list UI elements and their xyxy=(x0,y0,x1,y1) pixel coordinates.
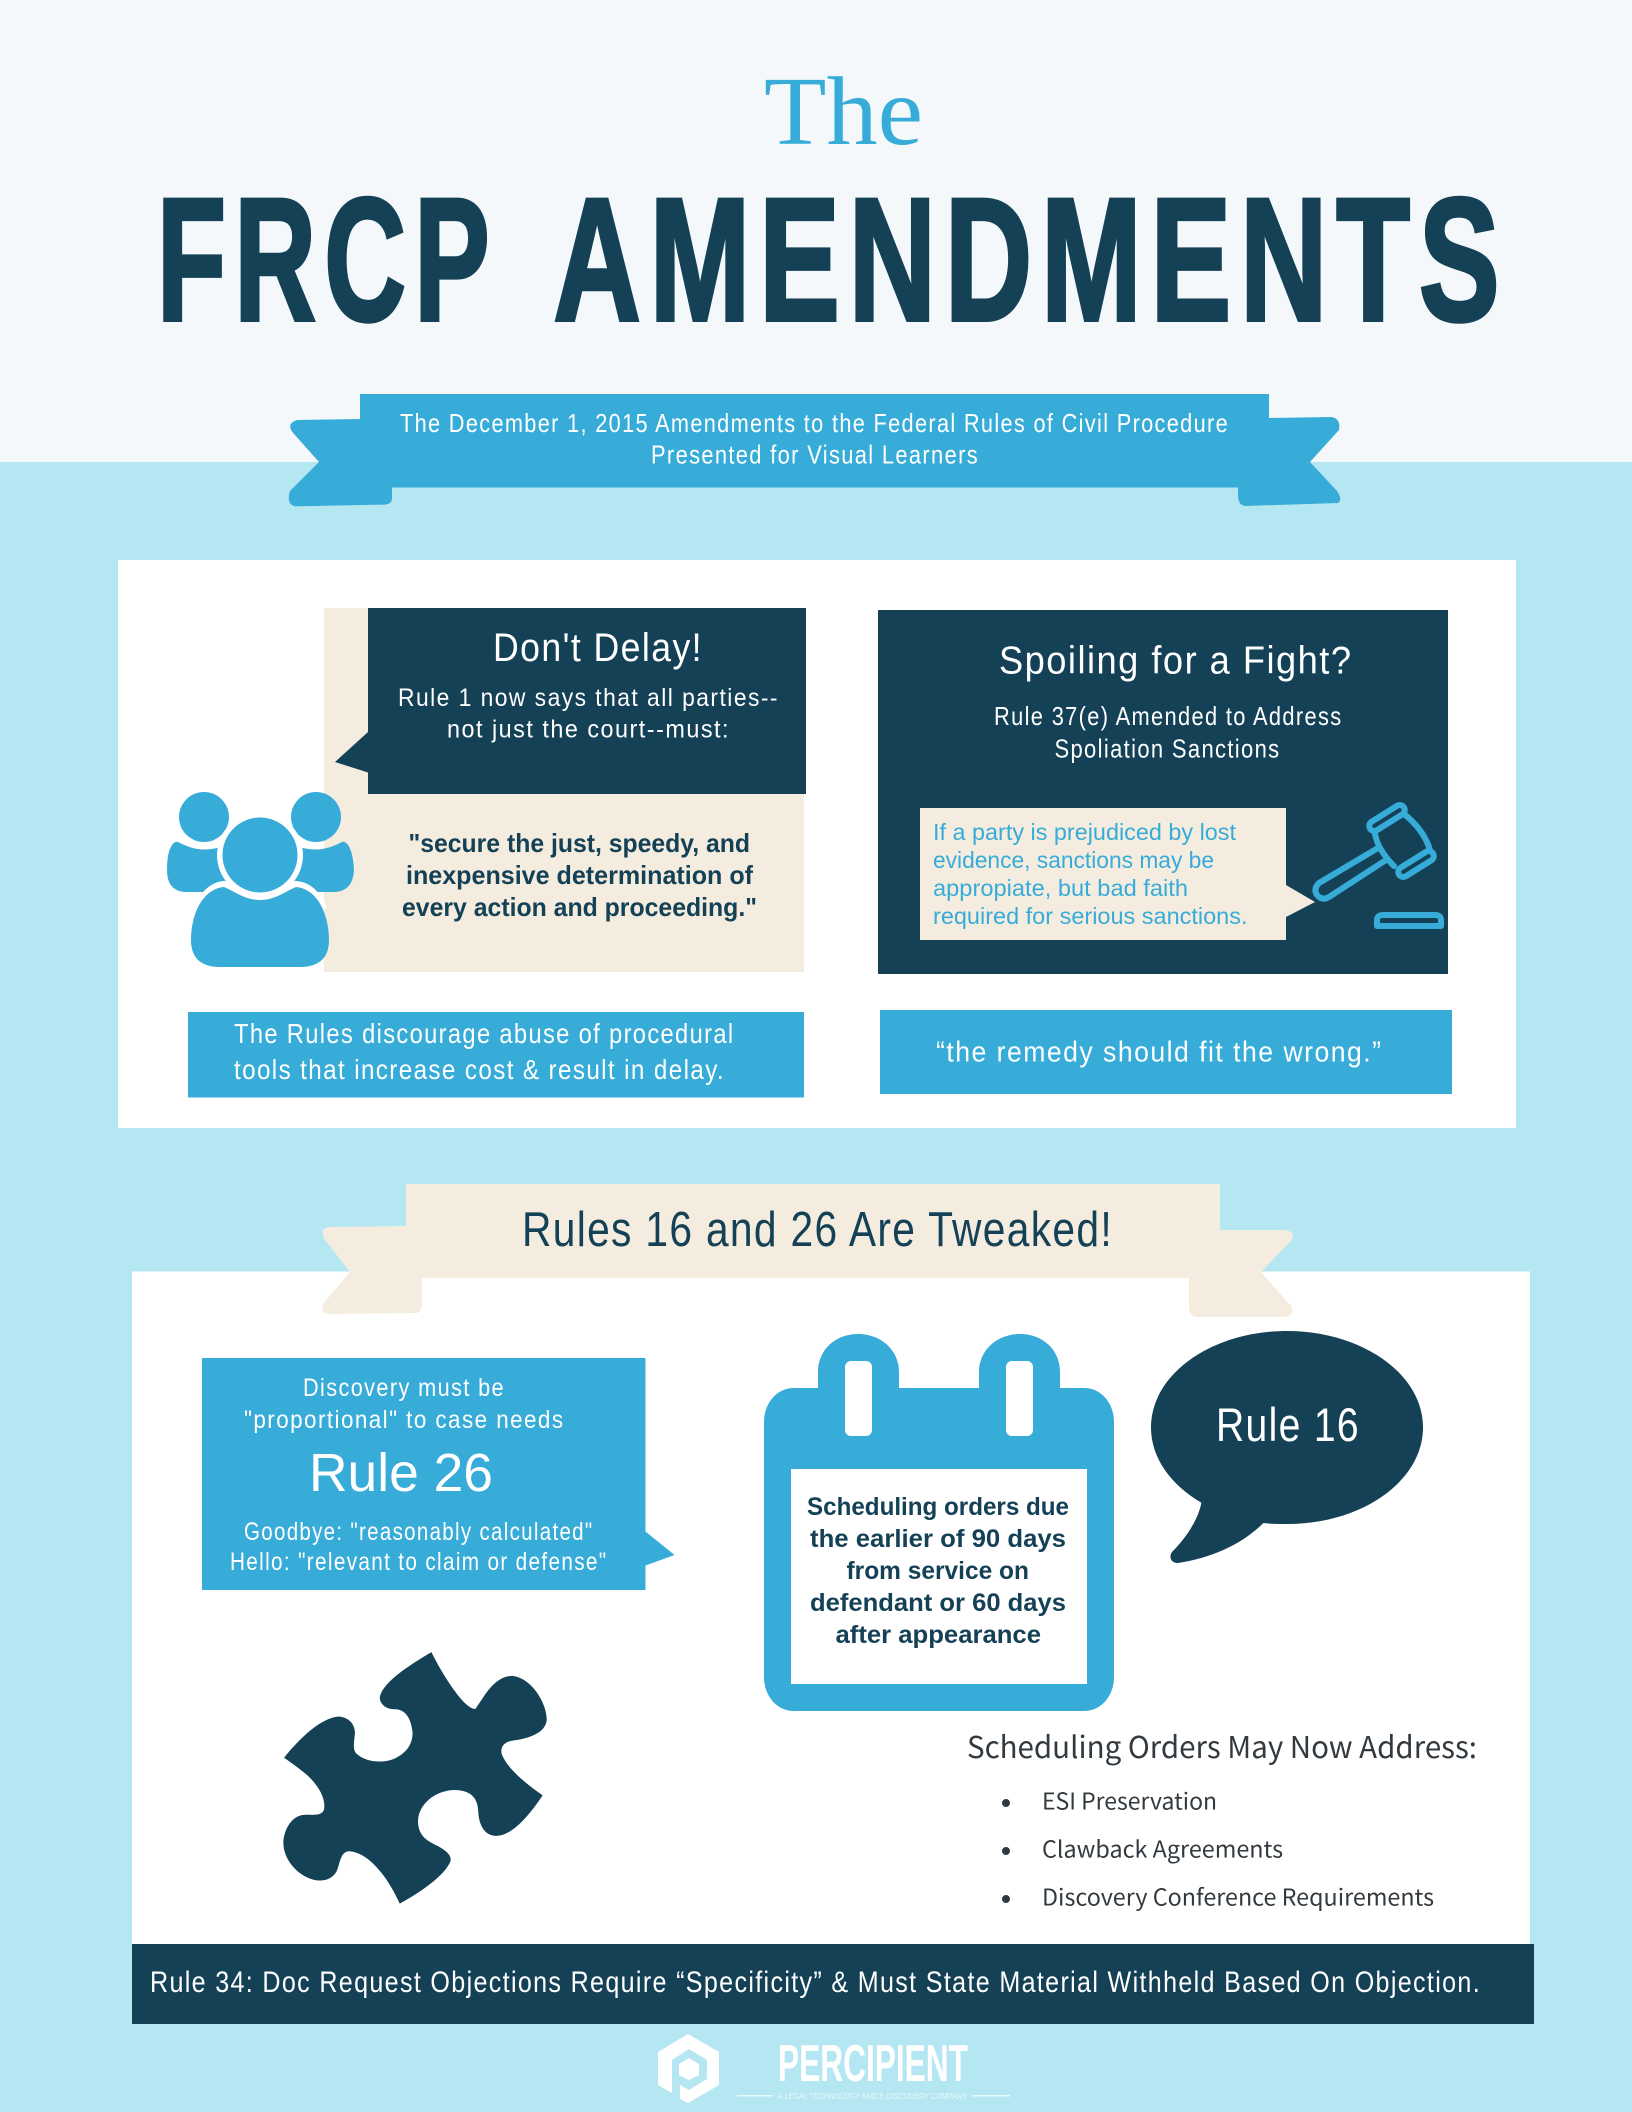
icon: puzzle piece xyxy=(283,1652,547,1904)
panel: Don't Delay xyxy=(324,608,806,972)
subtitle line 1: The December 1, 2015 Amendments to the Federal Rules of Civil Procedure xyxy=(400,408,1229,438)
subtitle line 2: Presented for Visual Learners xyxy=(651,440,979,470)
text: Rule 1 quote: every action and proceeding." xyxy=(402,892,757,922)
list item: Discovery Conference Requirements: Discovery Conference Requirements xyxy=(1042,1878,1434,1912)
wordmark: PERCIPIENT: PERCIPIENT xyxy=(778,2035,968,2093)
callout: remedy quote xyxy=(880,1010,1452,1094)
icon: speech bubble Rule 16: Rule 16 xyxy=(1216,1398,1360,1451)
banner: subtitle ribbon xyxy=(289,394,1340,506)
text: Rule 37(e) line 2: Spoliation Sanctions xyxy=(1054,734,1280,764)
title xyxy=(157,58,1508,358)
text: Rule 37(e) line 1: Rule 37(e) Amended to Address xyxy=(994,701,1342,731)
text: Scheduling orders list xyxy=(967,1723,1477,1912)
icon: gavel xyxy=(1315,803,1441,926)
text: scheduling orders: from service on xyxy=(846,1557,1029,1585)
text: scheduling orders: the earlier of 90 days xyxy=(810,1525,1066,1553)
callout: discourage abuse: The Rules discourage abuse of procedural xyxy=(234,1018,734,1049)
callout: Rule 26 xyxy=(202,1358,674,1590)
text: scheduling orders xyxy=(807,1493,1069,1649)
text: scheduling orders: after appearance xyxy=(836,1621,1041,1649)
panel: Spoiling for a Fight xyxy=(878,610,1448,974)
banner: Rules 16 and 26 Are Tweaked xyxy=(322,1184,1293,1317)
callout: discourage abuse: tools that increase cost & result in delay. xyxy=(234,1054,725,1085)
callout: remedy quote: “the remedy should fit the wrong.” xyxy=(936,1036,1382,1068)
text: scheduling orders: Scheduling orders due xyxy=(807,1493,1069,1521)
banner: Rules 16 and 26 Are Tweaked: Rules 16 and 26 Are Tweaked! xyxy=(522,1203,1113,1257)
bar: Rule 34 xyxy=(132,1944,1534,2024)
heading: Don't Delay: Don't Delay! xyxy=(493,626,703,670)
icon: calendar xyxy=(764,1334,1114,1711)
callout: sanctions: appropiate, but bad faith xyxy=(933,875,1188,901)
callout: Rule 1 speech box xyxy=(335,608,806,794)
text: Rule 1 quote: inexpensive determination of xyxy=(406,860,753,890)
callout: sanctions: If a party is prejudiced by lost xyxy=(933,819,1237,845)
callout: discourage abuse xyxy=(188,1012,804,1098)
heading: Spoiling for a Fight: Spoiling for a Fight? xyxy=(999,640,1352,682)
title: FRCP AMENDMENTS: FRCP xyxy=(157,163,498,358)
icon: Percipient hexagon xyxy=(658,2034,719,2103)
heading: Scheduling Orders May Now Address: Scheduling Orders May Now Address: xyxy=(967,1723,1477,1767)
list item: ESI Preservation: ESI Preservation xyxy=(1042,1782,1217,1816)
text: Rule 1 line 2: not just the court--must: xyxy=(447,716,730,744)
text: proportional: Discovery must be xyxy=(303,1374,505,1402)
text: Rule 1 quote: "secure the just, speedy, and xyxy=(408,828,750,858)
tagline: A LEGAL TECHNOLOGY AND E-DISCOVERY COMPANY xyxy=(778,2092,968,2101)
text: goodbye hello xyxy=(230,1518,608,1576)
logo: Percipient xyxy=(658,2034,1010,2103)
panel: Rule 1 and Rule 37(e) xyxy=(118,560,1516,1128)
callout: sanctions: required for serious sanctions. xyxy=(933,903,1248,929)
text: scheduling orders: defendant or 60 days xyxy=(810,1589,1066,1617)
text: Rule 1 line 1: Rule 1 now says that all parties-- xyxy=(398,684,779,712)
callout: sanctions xyxy=(920,808,1315,940)
title: FRCP AMENDMENTS xyxy=(157,163,1508,358)
panel: Rules 16 and 26 xyxy=(132,1184,1530,1952)
text: proportional: "proportional" to case needs xyxy=(244,1406,564,1434)
icon: group of people xyxy=(167,792,354,967)
text: Rule 1 quote xyxy=(402,828,757,922)
callout: sanctions: evidence, sanctions may be xyxy=(933,847,1214,873)
icon: speech bubble Rule 16 xyxy=(1151,1331,1423,1563)
text: goodbye hello: Hello: "relevant to claim or defense" xyxy=(230,1548,608,1576)
heading: Rule 26: Rule 26 xyxy=(309,1443,493,1503)
text: goodbye hello: Goodbye: "reasonably calculated" xyxy=(244,1518,594,1546)
list item: Clawback Agreements: Clawback Agreements xyxy=(1042,1830,1283,1864)
text: proportional xyxy=(244,1374,564,1434)
title: The: The xyxy=(764,58,923,165)
